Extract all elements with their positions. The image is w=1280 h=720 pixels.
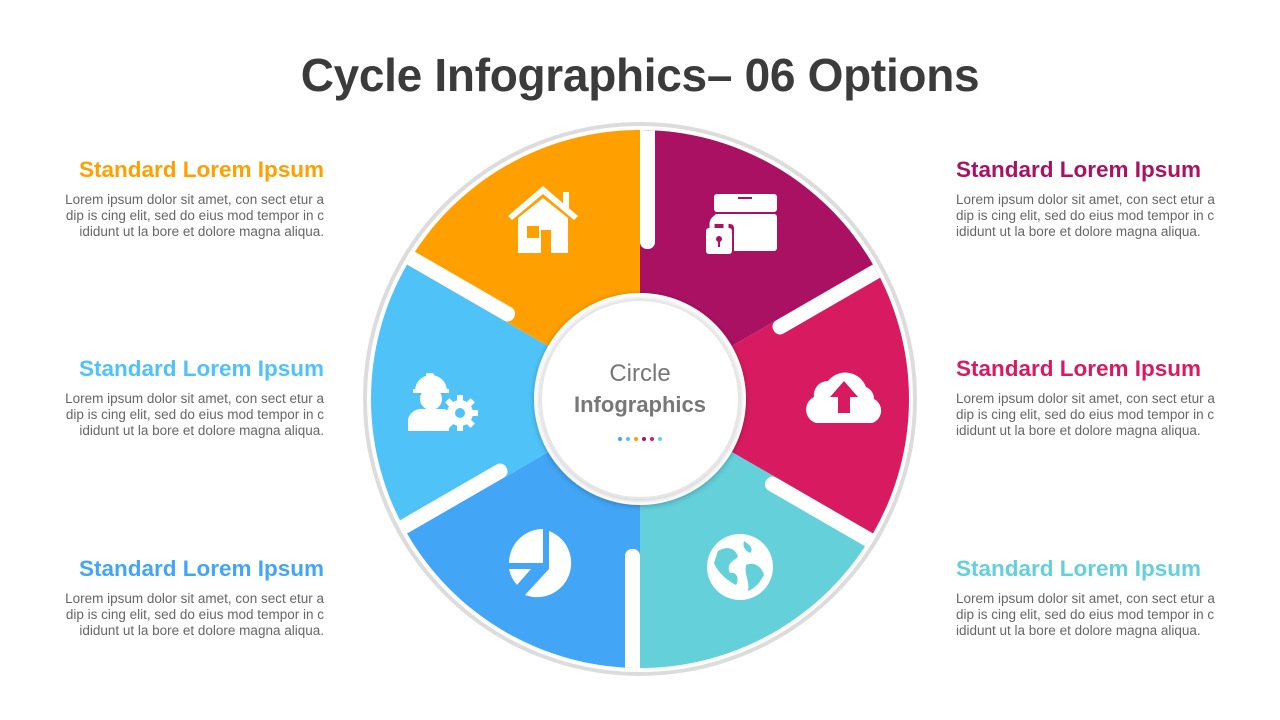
text block: left 2 (65, 356, 324, 438)
center circle: Circle (609, 360, 671, 387)
center circle (534, 293, 746, 505)
icon: cloud upload (806, 373, 881, 423)
text block: right 2: dip is cing elit, sed do eius mod tempor in c (956, 407, 1214, 422)
text block: left 1: Standard Lorem Ipsum (79, 157, 324, 182)
text block: right 2 (956, 356, 1215, 438)
text block: right 2: ididunt ut la bore et dolore magna aliqua. (956, 423, 1201, 438)
segment: light blue (371, 264, 640, 534)
segment: teal (640, 399, 873, 668)
text block: right 3: Lorem ipsum dolor sit amet, con sect etur a (956, 591, 1215, 606)
text block: right 3: dip is cing elit, sed do eius mod tempor in c (956, 607, 1214, 622)
text block: left 3: Standard Lorem Ipsum (79, 556, 324, 581)
text block: right 2: Standard Lorem Ipsum (956, 356, 1201, 381)
text block: right 1: dip is cing elit, sed do eius mod tempor in c (956, 208, 1214, 223)
text block: right 3: ididunt ut la bore et dolore magna aliqua. (956, 623, 1201, 638)
text block: left 3: Lorem ipsum dolor sit amet, con sect etur a (65, 591, 324, 606)
text block: left 2: ididunt ut la bore et dolore magna aliqua. (79, 423, 324, 438)
icon: house (508, 186, 578, 253)
title: Cycle Infographics– 06 Options (301, 49, 979, 101)
cycle diagram (363, 122, 917, 676)
segment: crimson (640, 264, 909, 534)
segment: magenta (640, 130, 873, 399)
text block: left 3: dip is cing elit, sed do eius mod tempor in c (66, 607, 324, 622)
text block: left 1: dip is cing elit, sed do eius mod tempor in c (66, 208, 324, 223)
text block: left 2: dip is cing elit, sed do eius mod tempor in c (66, 407, 324, 422)
text block: right 1: Standard Lorem Ipsum (956, 157, 1201, 182)
text block: left 2: Lorem ipsum dolor sit amet, con sect etur a (65, 391, 324, 406)
center circle: Infographics (574, 392, 706, 417)
text block: right 3 (956, 556, 1215, 638)
text block: right 1: Lorem ipsum dolor sit amet, con sect etur a (956, 192, 1215, 207)
text block: left 1: Lorem ipsum dolor sit amet, con sect etur a (65, 192, 324, 207)
icon: box with lock (704, 194, 777, 258)
segment: blue (407, 399, 640, 668)
icon: worker with gear (408, 373, 478, 431)
text block: left 1: ididunt ut la bore et dolore magna aliqua. (79, 224, 324, 239)
outer ring (365, 124, 915, 674)
icon: globe (707, 534, 773, 600)
text block: left 2: Standard Lorem Ipsum (79, 356, 324, 381)
text block: left 3: ididunt ut la bore et dolore magna aliqua. (79, 623, 324, 638)
text block: right 1 (956, 157, 1215, 239)
text block: right 3: Standard Lorem Ipsum (956, 556, 1201, 581)
text block: right 2: Lorem ipsum dolor sit amet, con sect etur a (956, 391, 1215, 406)
icon: pie chart (509, 529, 571, 597)
text block: left 1 (65, 157, 324, 239)
text block: right 1: ididunt ut la bore et dolore magna aliqua. (956, 224, 1201, 239)
text block: left 3 (65, 556, 324, 638)
segment: orange (407, 130, 640, 399)
